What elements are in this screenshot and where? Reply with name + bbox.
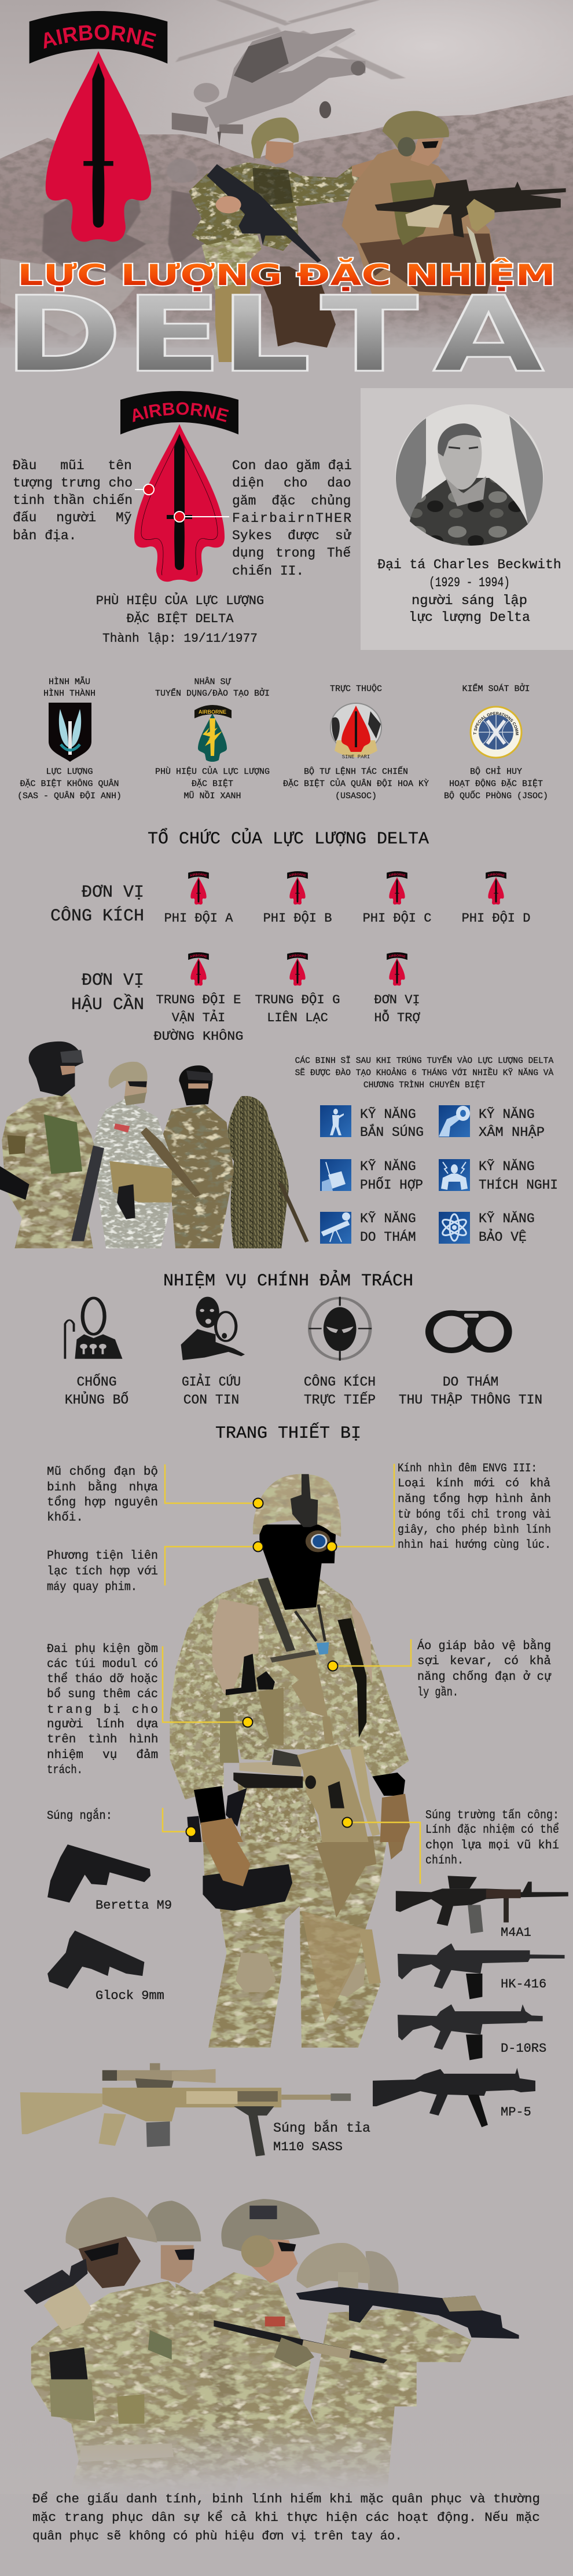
panel: insignia bbox=[13, 391, 352, 646]
skill: infiltration bbox=[439, 1105, 545, 1140]
callout: helmet: tổng hợp nguyên bbox=[47, 1496, 158, 1510]
skill: reconnaissance bbox=[320, 1211, 416, 1245]
callout: handguns: Súng ngắn: bbox=[47, 1808, 112, 1823]
unit: platoon G: TRUNG ĐỘI G bbox=[255, 992, 340, 1007]
second soldier bbox=[91, 1062, 201, 1248]
airborne tab text: AIRBORNE bbox=[44, 24, 156, 49]
pistol: Glock 9mm bbox=[47, 1931, 164, 2003]
third soldier bbox=[161, 1065, 234, 1248]
affiliation: JSOC: BỘ QUỐC PHÒNG (JSOC) bbox=[444, 791, 548, 801]
pistol: Beretta M9: Beretta M9 bbox=[95, 1898, 172, 1913]
affiliation: USASOC: ĐẶC BIỆT CỦA QUÂN ĐỘI HOA KỲ bbox=[283, 778, 429, 789]
head, helmet and goggles bbox=[253, 1474, 341, 1610]
icon: SAS shield bbox=[49, 703, 91, 762]
callout: night vision: giây, cho phép bình lính bbox=[398, 1523, 551, 1537]
unit: squadron C: AIRBORNE bbox=[389, 873, 406, 877]
skill: shooting: KỸ NĂNG bbox=[360, 1106, 416, 1122]
mission labels: KHỦNG BỐ bbox=[65, 1390, 128, 1408]
skill: shooting bbox=[320, 1105, 424, 1140]
large insignia: AIRBORNE bbox=[133, 402, 229, 422]
training intro: CHƯƠNG TRÌNH CHUYÊN BIỆT bbox=[363, 1080, 485, 1090]
skill: protection bbox=[439, 1211, 535, 1245]
affiliation: SAS bbox=[17, 677, 122, 801]
unit: support: ĐƠN VỊ bbox=[374, 993, 420, 1007]
icon: special forces badge bbox=[194, 705, 232, 762]
torso and arms bbox=[170, 1577, 410, 1842]
rear soldiers bbox=[297, 2243, 472, 2493]
rifle: MP-5 bbox=[373, 2068, 535, 2127]
affiliation: USASOC: BỘ TƯ LỆNH TÁC CHIẾN bbox=[304, 766, 408, 777]
icon: binoculars bbox=[429, 1311, 508, 1350]
unit: squadron C: PHI ĐỘI C bbox=[363, 911, 431, 926]
text: dagger meaning: FairbairnTHER bbox=[232, 511, 351, 526]
icon: counter-terrorism bbox=[65, 1298, 123, 1359]
central soldier figure bbox=[170, 1474, 410, 2048]
mission labels: TRỰC TIẾP bbox=[304, 1391, 376, 1408]
affiliation: SAS: HÌNH THÀNH bbox=[43, 688, 95, 699]
unit: platoon G bbox=[255, 952, 340, 1025]
unit: platoon E: AIRBORNE bbox=[190, 954, 207, 958]
second front soldier bbox=[147, 2201, 252, 2493]
affiliation: Green Berets: PHÙ HIỆU CỦA LỰC LƯỢNG bbox=[155, 766, 270, 777]
caption: insignia bbox=[96, 593, 264, 646]
unit: squadron D bbox=[462, 871, 530, 926]
affiliation: Green Berets: NHÂN SỰ bbox=[194, 677, 232, 687]
unit: squadron B bbox=[263, 871, 332, 926]
affiliation: USASOC: (USASOC) bbox=[335, 791, 377, 801]
founder caption bbox=[377, 557, 561, 625]
helicopter bbox=[172, 0, 406, 147]
rifle: HK-416: HK-416 bbox=[501, 1977, 546, 1992]
founder caption: Đại tá Charles Beckwith bbox=[377, 557, 561, 572]
affiliation: USASOC bbox=[283, 684, 429, 801]
skill: infiltration: KỸ NĂNG bbox=[479, 1106, 535, 1122]
text: dagger meaning: Sykes được sử bbox=[232, 528, 352, 543]
row label: assault units: CÔNG KÍCH bbox=[50, 906, 144, 926]
callout: communications: lạc tích hợp với bbox=[47, 1565, 158, 1579]
callout: communications: Phương tiện liên bbox=[47, 1550, 158, 1563]
row label: assault units bbox=[50, 883, 144, 926]
icon: USASOC crest: SINE PARI bbox=[342, 754, 370, 760]
icon: JSOC seal bbox=[470, 706, 522, 759]
unit: squadron A: AIRBORNE bbox=[190, 873, 207, 877]
unit: platoon G: AIRBORNE bbox=[289, 954, 306, 958]
rifle: M4A1 bbox=[396, 1876, 568, 1940]
text: arrowhead meaning bbox=[13, 458, 133, 543]
panel: assault units bbox=[50, 871, 530, 926]
unit: squadron B: AIRBORNE bbox=[289, 873, 306, 877]
faded background soldiers bbox=[0, 159, 205, 337]
text: arrowhead meaning: tượng trưng cho bbox=[13, 476, 133, 491]
mission labels: THU THẬP THÔNG TIN bbox=[399, 1391, 542, 1408]
lower body bbox=[203, 1836, 406, 2048]
text: dagger meaning: Con dao găm đại bbox=[232, 458, 352, 473]
front soldier bbox=[24, 2197, 219, 2493]
header soldier right bbox=[341, 111, 566, 295]
backpack bbox=[255, 266, 336, 348]
callout: accessory belt: các túi modul có bbox=[47, 1658, 158, 1671]
center soldier bbox=[194, 2199, 351, 2493]
training intro bbox=[295, 1055, 554, 1090]
rifle: M4A1: M4A1 bbox=[501, 1925, 531, 1940]
bottom fade of banner bbox=[0, 307, 573, 353]
callout: body armour: sợi kevar, có khả bbox=[417, 1655, 551, 1668]
panel: missions bbox=[65, 1297, 542, 1408]
callout: body armour: ly gần. bbox=[417, 1686, 458, 1700]
sniper in ghillie suit bbox=[227, 1096, 289, 1248]
unit: support bbox=[374, 952, 420, 1025]
unit: squadron D: PHI ĐỘI D bbox=[462, 911, 530, 926]
skill: adaptation: KỸ NĂNG bbox=[479, 1159, 535, 1174]
skill: shooting: BẮN SÚNG bbox=[360, 1123, 424, 1140]
skill: coordination bbox=[320, 1159, 423, 1193]
skill: infiltration: XÂM NHẬP bbox=[479, 1124, 545, 1140]
soldiers group photo bbox=[0, 1042, 309, 1248]
large insignia bbox=[120, 391, 238, 582]
callout: night vision: từ bóng tối chỉ trong vài bbox=[398, 1508, 551, 1522]
text: dagger meaning: dụng trong Thế bbox=[232, 546, 351, 561]
affiliation: JSOC: KIỂM SOÁT BỞI bbox=[462, 683, 530, 694]
callout: accessory belt: trang bị cho bbox=[47, 1704, 158, 1717]
unit: squadron C bbox=[363, 871, 431, 926]
callout marker: dagger bbox=[174, 511, 229, 522]
text: dagger meaning: diện cho dao bbox=[232, 476, 351, 491]
icon: USASOC crest bbox=[330, 703, 381, 760]
skill: reconnaissance: KỸ NĂNG bbox=[360, 1211, 416, 1226]
caption: insignia: PHÙ HIỆU CỦA LỰC LƯỢNG bbox=[96, 593, 264, 608]
affiliation: Green Berets: MŨ NỒI XANH bbox=[183, 791, 241, 801]
rifle: D-10RS bbox=[398, 2004, 546, 2060]
unit: support: AIRBORNE bbox=[389, 954, 406, 958]
header soldier left bbox=[189, 118, 383, 295]
text: dagger meaning: găm đặc chủng bbox=[232, 494, 351, 509]
callout: night vision: Loại kính mới có khả bbox=[398, 1477, 550, 1490]
row label: logistics units bbox=[71, 971, 144, 1015]
mission labels: CHỐNG bbox=[76, 1373, 117, 1390]
training intro: CÁC BINH SĨ SAU KHI TRÚNG TUYỂN VÀO LỰC LƯỢNG DELTA bbox=[295, 1055, 554, 1066]
unit: squadron A: PHI ĐỘI A bbox=[164, 911, 233, 926]
callout: accessory belt bbox=[47, 1643, 252, 1777]
unit: platoon G: LIÊN LẠC bbox=[267, 1010, 328, 1025]
mission labels: GIẢI CỨU bbox=[182, 1372, 241, 1390]
closing note: Để che giấu danh tính, binh lính hiếm khi mặc quân phục và thường bbox=[32, 2491, 540, 2506]
heading: organisation: TỔ CHỨC CỦA LỰC LƯỢNG DELTA bbox=[148, 828, 429, 849]
text: arrowhead meaning: đấu người Mỹ bbox=[13, 510, 132, 525]
unit: support: HỖ TRỢ bbox=[374, 1009, 420, 1025]
callout: body armour: Áo giáp bảo vệ bằng bbox=[417, 1639, 551, 1653]
rifle: D-10RS: D-10RS bbox=[501, 2041, 546, 2056]
unit: platoon E: TRUNG ĐỘI E bbox=[156, 992, 241, 1007]
affiliation: JSOC: BỘ CHỈ HUY bbox=[470, 766, 522, 777]
skill: coordination: KỸ NĂNG bbox=[360, 1159, 416, 1174]
callout: helmet: binh bằng nhựa bbox=[47, 1480, 158, 1495]
callout: communications bbox=[47, 1542, 263, 1594]
first soldier bbox=[0, 1042, 104, 1248]
mountains backdrop bbox=[0, 95, 573, 348]
skill: coordination: PHỐI HỢP bbox=[360, 1176, 423, 1193]
sniper rifle: M110 SASS: Súng bắn tỉa bbox=[273, 2120, 370, 2136]
DELTA title: DELTA bbox=[3, 275, 544, 396]
callout: night vision bbox=[326, 1462, 551, 1552]
skill: adaptation bbox=[439, 1159, 558, 1193]
callout: night vision: Kính nhìn đêm ENVG III: bbox=[398, 1462, 537, 1475]
affiliation: SAS: HÌNH MẪU bbox=[49, 677, 90, 687]
closing note: quân phục sẽ không có phù hiệu đơn vị trên tay áo. bbox=[32, 2529, 402, 2544]
closing note bbox=[32, 2491, 540, 2544]
row label: logistics units: HẬU CẦN bbox=[71, 993, 144, 1015]
icon: direct assault bbox=[309, 1297, 372, 1361]
text: arrowhead meaning: tinh thần chiến bbox=[13, 493, 133, 508]
rifle: HK-416 bbox=[398, 1943, 565, 1999]
callout: accessory belt: bổ sung thêm các bbox=[47, 1687, 158, 1701]
callout: accessory belt: trên tình hình bbox=[47, 1733, 158, 1746]
callout: night vision: nhìn hai hướng cùng lúc. bbox=[398, 1539, 551, 1552]
panel: founder bbox=[361, 388, 573, 650]
text: dagger meaning: chiến II. bbox=[232, 564, 304, 579]
rifle: MP-5: MP-5 bbox=[501, 2105, 531, 2120]
panel: training skills bbox=[295, 1055, 558, 1245]
caption: insignia: Thành lập: 19/11/1977 bbox=[102, 631, 258, 646]
affiliation: Green Berets: TUYỂN DỤNG/ĐÀO TẠO BỞI bbox=[155, 688, 270, 699]
callout: accessory belt: người lính dựa bbox=[47, 1718, 158, 1731]
callout: helmet bbox=[47, 1464, 263, 1525]
callout: accessory belt: trách. bbox=[47, 1764, 83, 1777]
affiliation: SAS: (SAS - QUÂN ĐỘI ANH) bbox=[17, 791, 122, 801]
rifles bbox=[214, 2272, 519, 2367]
skill: reconnaissance: DO THÁM bbox=[360, 1229, 416, 1245]
portrait bbox=[395, 404, 543, 546]
mission labels bbox=[65, 1372, 542, 1408]
callout: assault rifle: chính. bbox=[425, 1854, 464, 1868]
unit: platoon E: ĐƯỜNG KHÔNG bbox=[154, 1029, 243, 1044]
heading: equipment: TRANG THIẾT BỊ bbox=[215, 1422, 361, 1444]
affiliation row bbox=[17, 677, 548, 801]
training intro: SẼ ĐƯỢC ĐÀO TẠO KHOẢNG 6 THÁNG VỚI NHIỀU KỸ NĂNG VÀ bbox=[295, 1068, 554, 1078]
unit: squadron B: PHI ĐỘI B bbox=[263, 911, 332, 926]
row label: logistics units: ĐƠN VỊ bbox=[82, 971, 144, 991]
text: arrowhead meaning: Đầu mũi tên bbox=[13, 458, 132, 473]
affiliation: Green Berets: ĐẶC BIỆT bbox=[192, 779, 233, 789]
callout marker: arrowhead bbox=[135, 484, 154, 495]
sniper rifle: M110 SASS bbox=[20, 2063, 370, 2156]
affiliation: JSOC: HOẠT ĐỘNG ĐẶC BIỆT bbox=[449, 779, 543, 789]
mission labels: DO THÁM bbox=[443, 1374, 498, 1390]
pistol: Beretta M9 bbox=[47, 1844, 172, 1913]
callout: body armour bbox=[328, 1639, 551, 1700]
callout: accessory belt: thể tháo dỡ hoặc bbox=[47, 1672, 158, 1686]
unit: platoon E bbox=[154, 952, 243, 1044]
callout: body armour: năng chống đạn ở cự bbox=[417, 1671, 551, 1684]
founder caption: (1929 - 1994) bbox=[429, 575, 510, 590]
affiliation: JSOC bbox=[444, 683, 548, 801]
icon: hostage rescue bbox=[181, 1297, 245, 1360]
heading: missions: NHIỆM VỤ CHÍNH ĐẢM TRÁCH bbox=[163, 1270, 413, 1291]
affiliation: USASOC: TRỰC THUỘC bbox=[330, 684, 382, 694]
text: arrowhead meaning: bản địa. bbox=[13, 528, 76, 543]
red spearhead insignia bbox=[29, 11, 168, 242]
callout: accessory belt: nhiệm vụ đảm bbox=[47, 1749, 158, 1762]
affiliation: SAS: ĐẶC BIỆT KHÔNG QUÂN bbox=[20, 779, 119, 789]
caption: insignia: ĐẶC BIỆT DELTA bbox=[127, 611, 234, 626]
affiliation: Green Berets bbox=[155, 677, 270, 801]
founder caption: người sáng lập bbox=[412, 593, 527, 608]
icon: JSOC seal: JOINT SPECIAL OPERATIONS COMMAND bbox=[473, 712, 519, 735]
callout: helmet: khối. bbox=[47, 1511, 83, 1525]
fade of soldiers into background bbox=[0, 2421, 573, 2494]
mission labels: CÔNG KÍCH bbox=[304, 1373, 376, 1390]
callout: assault rifle: chọn lựa mọi vũ khí bbox=[425, 1839, 559, 1852]
closing photo: soldiers in formation bbox=[0, 2197, 573, 2494]
affiliation: SAS: LỰC LƯỢNG bbox=[46, 767, 93, 777]
founder caption: lực lượng Delta bbox=[409, 610, 530, 625]
mission labels: CON TIN bbox=[183, 1393, 239, 1408]
callout: accessory belt: Đai phụ kiện gồm bbox=[47, 1643, 158, 1656]
skill: protection: BẢO VỆ bbox=[479, 1227, 527, 1245]
callout: helmet: Mũ chống đạn bộ bbox=[47, 1466, 158, 1479]
callout: night vision: năng tổng hợp hình ảnh bbox=[398, 1492, 551, 1506]
callout: handguns bbox=[47, 1808, 196, 1836]
callout: communications: máy quay phim. bbox=[47, 1581, 137, 1594]
panel: logistics units bbox=[71, 952, 420, 1044]
unit: squadron A bbox=[164, 871, 233, 926]
header banner bbox=[0, 0, 573, 396]
kneeling leg bbox=[215, 278, 252, 362]
text: dagger meaning bbox=[232, 458, 352, 579]
title: LUC LUONG DAC NHIEM: LỰC LƯỢNG ĐẶC NHIỆM bbox=[17, 257, 556, 292]
skill: adaptation: THÍCH NGHI bbox=[479, 1177, 558, 1193]
sniper rifle: M110 SASS: M110 SASS bbox=[273, 2140, 343, 2154]
icon: special forces badge: AIRBORNE bbox=[199, 709, 226, 715]
pistol: Glock 9mm: Glock 9mm bbox=[95, 1989, 164, 2003]
unit: squadron D: AIRBORNE bbox=[487, 873, 505, 877]
closing note: mặc trang phục dân sự kể cả khi thực hiện các hoạt động. Nếu mặc bbox=[32, 2510, 540, 2525]
skill: protection: KỸ NĂNG bbox=[479, 1211, 535, 1226]
row label: assault units: ĐƠN VỊ bbox=[82, 883, 144, 902]
unit: platoon E: VẬN TẢI bbox=[172, 1010, 225, 1025]
callout: assault rifle bbox=[343, 1809, 559, 1884]
